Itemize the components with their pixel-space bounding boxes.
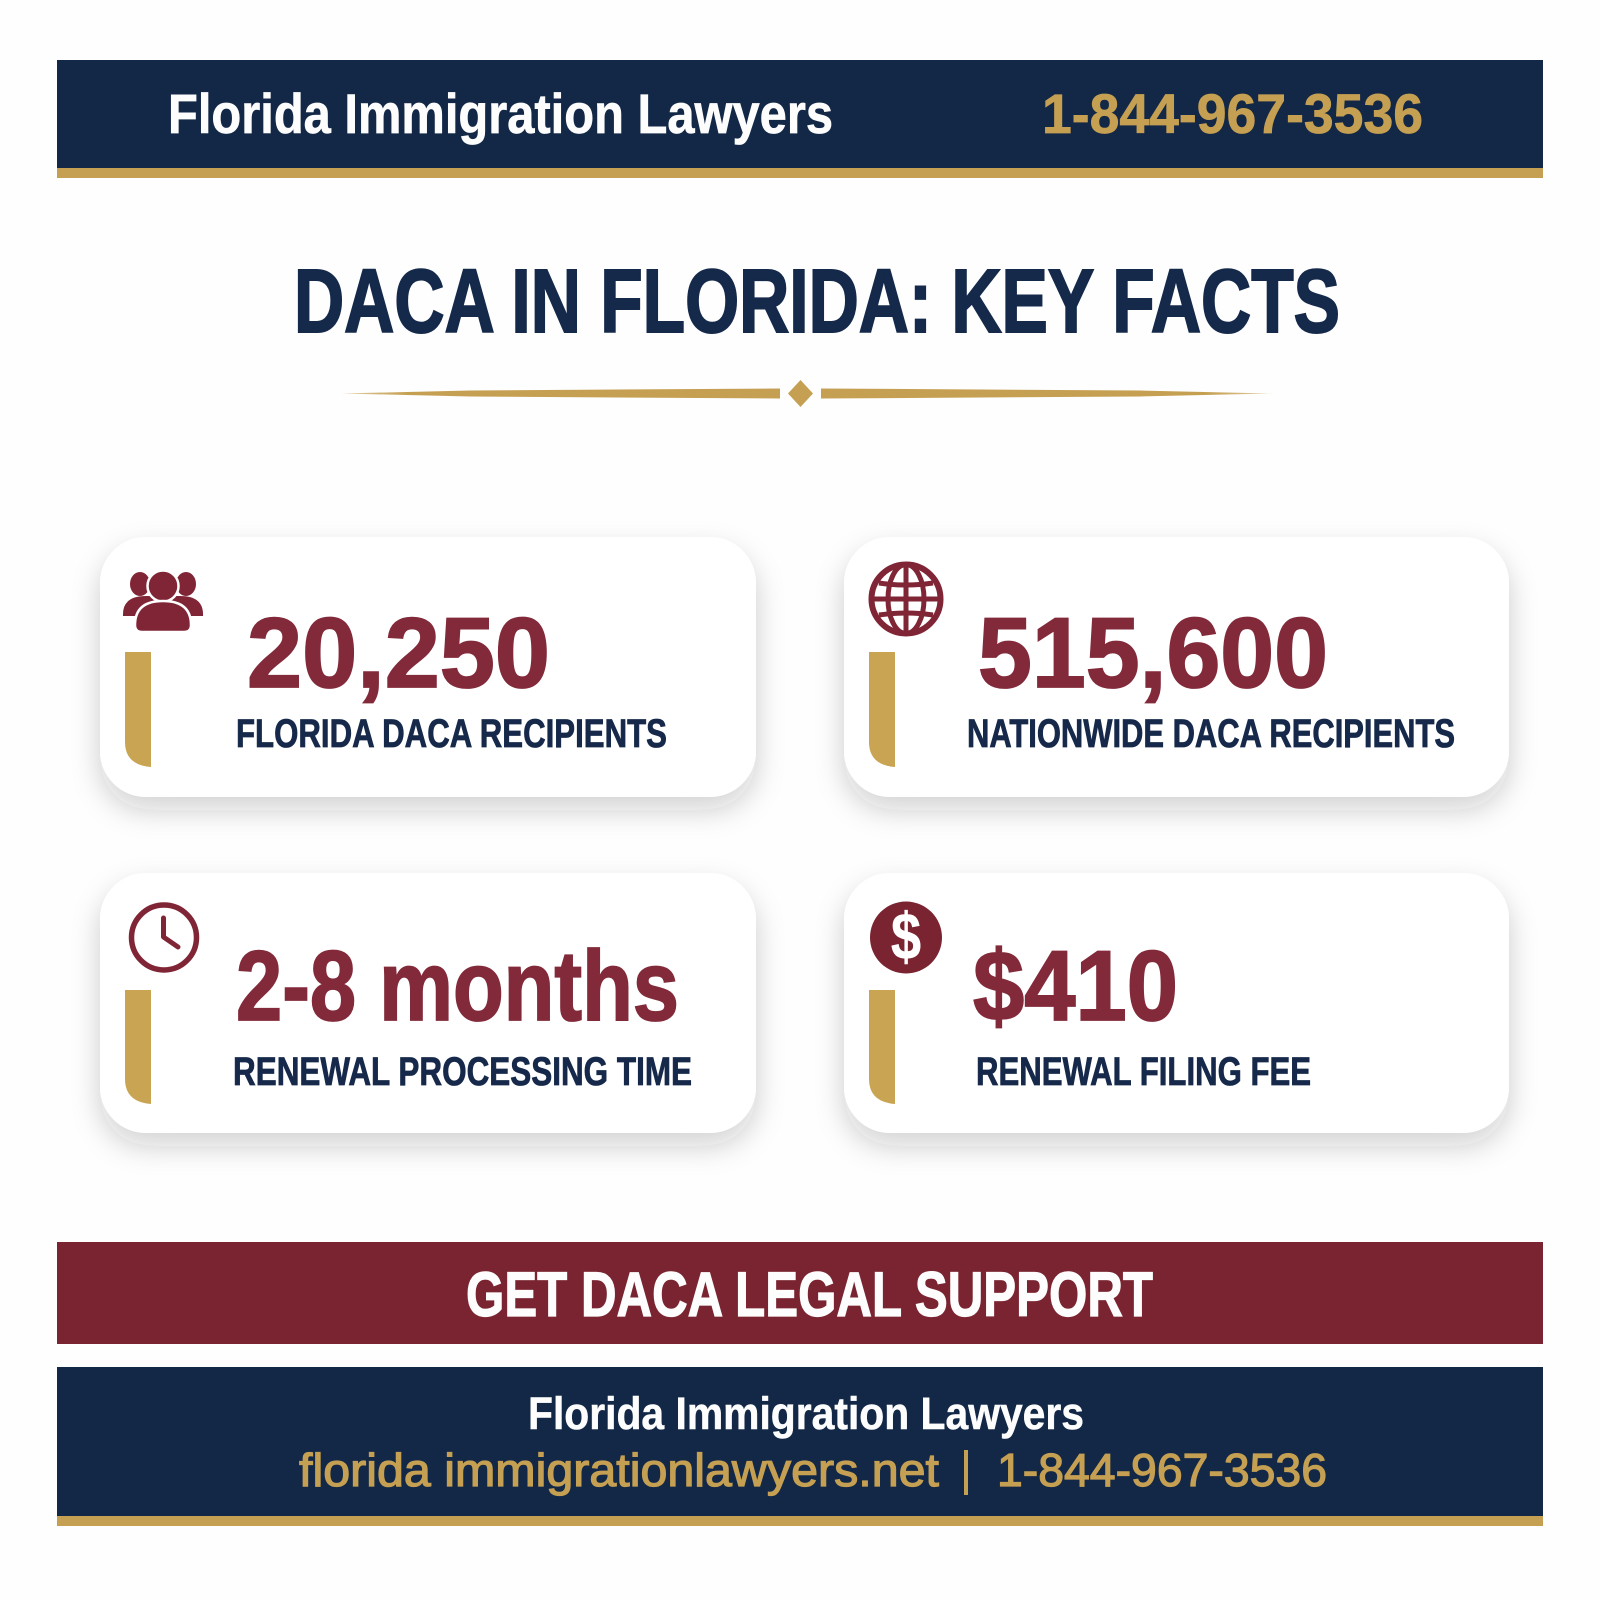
- icon: clock: [132, 905, 196, 970]
- stat: $410: $410: [973, 930, 1178, 1041]
- panel: nationwide DACA recipients: [844, 537, 1509, 797]
- header banner: [57, 60, 1543, 178]
- footer phone number: 1-844-967-3536: [997, 1444, 1327, 1496]
- footer firm name: Florida Immigration Lawyers: [528, 1388, 1084, 1439]
- title divider with diamond: [341, 380, 1273, 407]
- stat: 515,600: 515,600: [978, 597, 1328, 708]
- footer banner: [57, 1367, 1543, 1526]
- icon: globe: [872, 564, 940, 634]
- label: Florida DACA recipients: FLORIDA DACA RECIPIENTS: [236, 712, 667, 756]
- icon: dollar coin: $: [891, 899, 921, 973]
- panel: Florida DACA recipients: [100, 537, 756, 797]
- gold accent bar: [869, 652, 895, 767]
- label: nationwide DACA recipients: NATIONWIDE DACA RECIPIENTS: [967, 712, 1455, 756]
- label: renewal processing time: RENEWAL PROCESSING TIME: [233, 1050, 692, 1094]
- icon: group of people: [123, 570, 203, 632]
- gold accent bar: [125, 652, 151, 767]
- panel: renewal filing fee: [844, 873, 1509, 1133]
- label: renewal filing fee: RENEWAL FILING FEE: [976, 1050, 1311, 1094]
- gold accent bar: [869, 990, 895, 1104]
- header firm name: Florida Immigration Lawyers: [168, 82, 833, 145]
- stat: 2-8 months: 2-8 months: [236, 930, 679, 1041]
- call to action text: GET DACA LEGAL SUPPORT: [466, 1260, 1153, 1330]
- header phone number: 1-844-967-3536: [1042, 82, 1423, 145]
- stat: 20,250: 20,250: [247, 597, 550, 708]
- footer separator: [964, 1450, 968, 1495]
- panel: renewal processing time: [100, 873, 756, 1133]
- icon: dollar coin: [870, 899, 942, 974]
- gold accent bar: [125, 990, 151, 1104]
- call to action banner: [57, 1242, 1543, 1344]
- footer website: florida immigrationlawyers.net: [299, 1444, 939, 1496]
